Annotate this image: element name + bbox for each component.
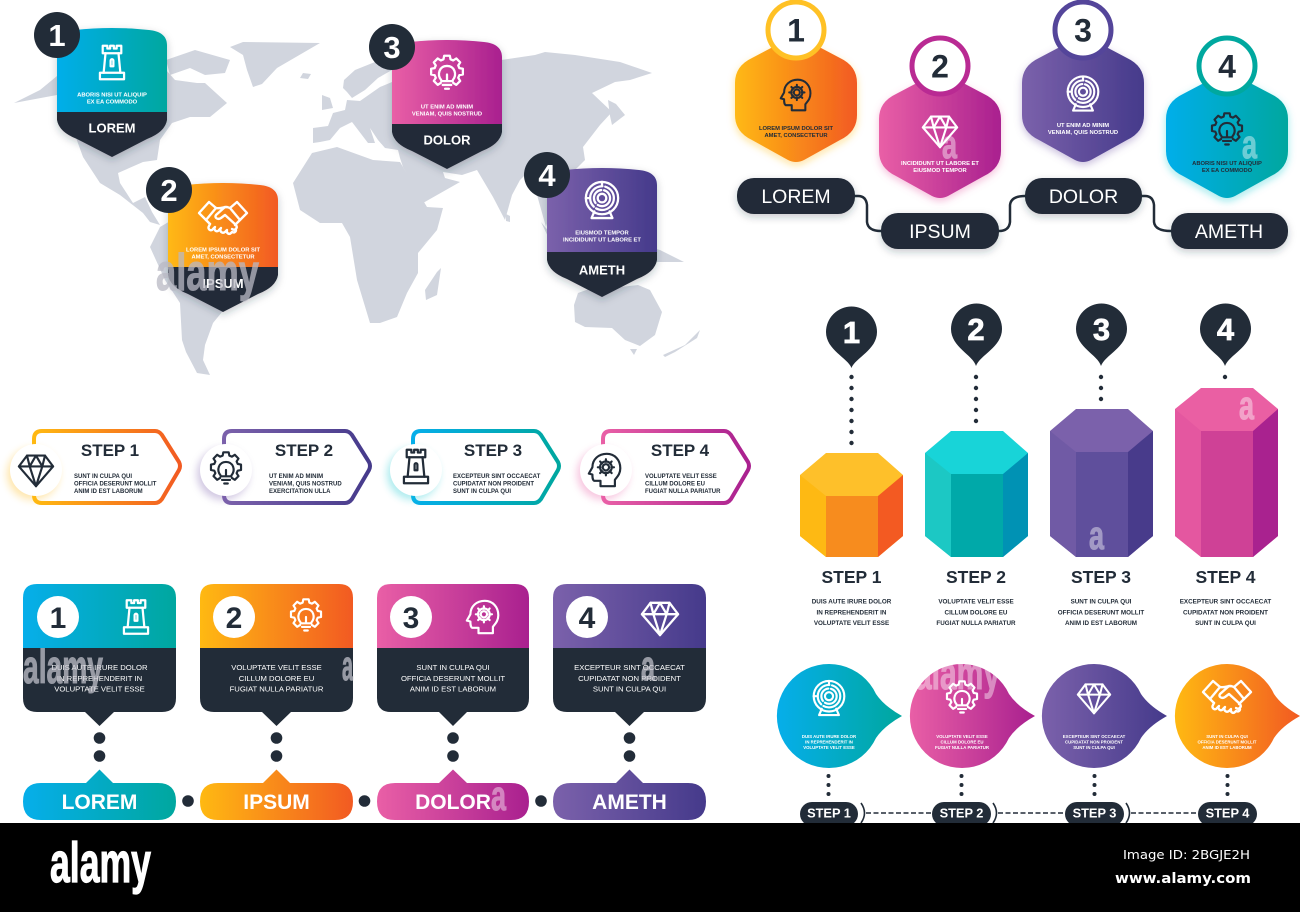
shield 1 lorem (57, 28, 167, 157)
hexagon 1 (735, 2, 857, 162)
hexagon 2 (879, 38, 1001, 198)
shield 3 dolor: VENIAM, QUIS NOSTRUD (412, 112, 482, 118)
teardrop 1: VOLUPTATE VELIT ESSE (803, 745, 855, 750)
hexagon 3: 3 (1074, 12, 1092, 48)
card 4: 4 (579, 602, 596, 635)
teardrop 3: EXCEPTEUR SINT OCCAECAT (1063, 734, 1126, 739)
pill ameth (1171, 213, 1288, 249)
panel: cards (23, 584, 706, 820)
step pill 4 (1198, 802, 1257, 826)
hexagon watermarks: a (942, 123, 958, 167)
teardrop 1: IN REPREHENDERIT IN (805, 740, 853, 744)
card watermarks: alamy (23, 640, 103, 693)
prism captions: CUPIDATAT NON PROIDENT (1183, 610, 1268, 616)
step pill 2: STEP 2 (940, 806, 983, 820)
label lorem (23, 770, 176, 820)
card 2: 2 (226, 602, 242, 635)
card watermarks: a (491, 772, 506, 819)
pin 3 (1076, 304, 1127, 366)
step pill 2 (932, 802, 991, 826)
prism captions: IN REPREHENDERIT IN (817, 610, 887, 616)
pin 3: 3 (1093, 312, 1110, 347)
step pill 3: STEP 3 (1073, 806, 1116, 820)
card 2: VOLUPTATE VELIT ESSE (231, 663, 322, 672)
prism watermarks: a (1089, 514, 1105, 558)
card 4: CUPIDATAT NON PROIDENT (578, 674, 681, 683)
prism captions: STEP 1 (822, 567, 882, 587)
teardrop 1 (777, 664, 902, 768)
hexagon watermarks (942, 123, 1258, 167)
label ameth (553, 770, 706, 820)
card 2: FUGIAT NULLA PARIATUR (230, 684, 324, 694)
teardrop watermark: alamy (915, 647, 1000, 699)
prism 2 (925, 431, 1028, 557)
teardrop connector dots (826, 774, 1230, 796)
teardrop 2: FUGIAT NULLA PARIATUR (935, 745, 990, 750)
hexagon 4: EX EA COMMODO (1202, 168, 1253, 174)
website: www.alamy.com (1115, 871, 1251, 887)
shield 2 ipsum: LOREM IPSUM DOLOR SIT (186, 248, 260, 254)
hexagon 4: 4 (1218, 48, 1236, 84)
shield 1 lorem: LOREM (89, 120, 135, 136)
hexagon 3: VENIAM, QUIS NOSTRUD (1048, 130, 1118, 136)
card 3: 3 (403, 602, 419, 635)
prism captions: OFFICIA DESERUNT MOLLIT (1058, 610, 1144, 616)
label dolor: DOLOR (415, 791, 491, 814)
hexagon 1: 1 (787, 12, 805, 48)
card watermarks (23, 640, 655, 819)
step pill 1 (800, 802, 858, 826)
panel: prisms (800, 304, 1278, 627)
step arrow 3: EXCEPTEUR SINT OCCAECAT (453, 474, 541, 480)
badge 4: 4 (538, 158, 556, 193)
card 1 (23, 584, 176, 726)
step arrow 3: CUPIDATAT NON PROIDENT (453, 482, 534, 488)
step arrow 3: SUNT IN CULPA QUI (453, 489, 511, 495)
card watermarks: a (342, 642, 353, 689)
shield 4 ameth: AMETH (579, 262, 625, 278)
label ipsum: IPSUM (243, 791, 310, 814)
card 4 (553, 584, 706, 726)
step arrow 2: EXERCITATION ULLA (269, 489, 331, 495)
step arrow 4: VOLUPTATE VELIT ESSE (645, 474, 717, 480)
watermark on map: alamy (156, 244, 259, 302)
shield 2 ipsum (168, 183, 278, 312)
step arrow 2: STEP 2 (275, 441, 333, 460)
prism captions: CILLUM DOLORE EU (945, 610, 1008, 616)
pill lorem: LOREM (761, 186, 831, 208)
pin 4 (1200, 304, 1251, 366)
step arrow 1: SUNT IN CULPA QUI (74, 474, 132, 480)
panel: map shields (34, 12, 657, 312)
shield 4 ameth (547, 168, 657, 297)
hexagon 3 (1022, 2, 1144, 162)
panel: teardrops (777, 647, 1300, 826)
badge 1 (34, 12, 80, 58)
pill dolor: DOLOR (1049, 186, 1118, 208)
badge 2: 2 (160, 173, 178, 208)
pin 1 (826, 307, 877, 368)
panel: hexagons (735, 2, 1288, 249)
prism captions: STEP 3 (1071, 567, 1131, 587)
badge 3 (369, 24, 415, 70)
prism captions: ANIM ID EST LABORUM (1065, 620, 1137, 627)
prism captions: STEP 4 (1196, 567, 1256, 587)
hexagon 2: 2 (931, 48, 949, 84)
step arrow 4: FUGIAT NULLA PARIATUR (645, 489, 721, 495)
prism 4 (1175, 388, 1278, 557)
hexagon watermarks: a (1242, 123, 1258, 167)
hexagon 1: AMET, CONSECTETUR (764, 133, 828, 139)
step pill 4: STEP 4 (1206, 806, 1250, 820)
teardrop 4 (1175, 664, 1300, 768)
step pill 1: STEP 1 (807, 806, 851, 820)
prism captions: FUGIAT NULLA PARIATUR (936, 620, 1016, 627)
prism captions (812, 567, 1271, 627)
pin 1: 1 (843, 315, 860, 350)
pill lorem (737, 178, 855, 214)
teardrop 4: OFFICIA DESERUNT MOLLIT (1197, 740, 1257, 744)
hexagon 1: LOREM IPSUM DOLOR SIT (759, 126, 833, 132)
shield 4 ameth: EIUSMOD TEMPOR (575, 230, 630, 236)
teardrop 2: CILLUM DOLORE EU (941, 740, 983, 744)
label lorem: LOREM (62, 791, 137, 814)
card 3: ANIM ID EST LABORUM (410, 684, 496, 694)
prism watermarks (1089, 384, 1255, 558)
hexagon 2: EIUSMOD TEMPOR (913, 168, 968, 174)
prism 1 (800, 453, 903, 557)
teardrop 1: DUIS AUTE IRURE DOLOR (802, 734, 857, 739)
teardrop 2: VOLUPTATE VELIT ESSE (936, 734, 988, 739)
card 4: EXCEPTEUR SINT OCCAECAT (574, 663, 685, 672)
shield 3 dolor: UT ENIM AD MINIM (421, 104, 473, 110)
step arrow 2: VENIAM, QUIS NOSTRUD (269, 482, 342, 488)
pin 2: 2 (967, 312, 985, 347)
card 1: DUIS AUTE IRURE DOLOR (51, 663, 148, 672)
prism captions: DUIS AUTE IRURE DOLOR (812, 598, 892, 606)
step arrow 4 (577, 431, 749, 503)
step arrow 1: ANIM ID EST LABORUM (74, 489, 143, 495)
card watermarks: a (641, 642, 655, 689)
shield 3 dolor: DOLOR (424, 132, 471, 148)
hexagon 3: UT ENIM AD MINIM (1057, 123, 1109, 129)
badge 4 (524, 152, 570, 198)
teardrop 4: SUNT IN CULPA QUI (1206, 734, 1248, 739)
teardrop 3: CUPIDATAT NON PROIDENT (1065, 740, 1123, 744)
prism captions: SUNT IN CULPA QUI (1071, 598, 1132, 606)
prism watermarks: a (1239, 384, 1255, 428)
pill ipsum (881, 213, 999, 249)
prism captions: SUNT IN CULPA QUI (1195, 620, 1256, 627)
panel: step arrows row (7, 431, 749, 503)
dotted connectors (849, 375, 1227, 445)
label dolor (377, 770, 529, 820)
prism captions: VOLUPTATE VELIT ESSE (814, 620, 889, 627)
teardrop 4: ANIM ID EST LABORUM (1202, 745, 1252, 750)
pin 4: 4 (1217, 312, 1235, 347)
badge 2 (146, 167, 192, 213)
card 2: CILLUM DOLORE EU (239, 674, 314, 683)
shield 2 ipsum: AMET, CONSECTETUR (191, 254, 255, 260)
card 4: SUNT IN CULPA QUI (593, 684, 666, 694)
card 2 (200, 584, 353, 726)
step arrow 4: STEP 4 (651, 441, 710, 460)
label ameth: AMETH (592, 791, 667, 814)
world map (14, 42, 700, 375)
step arrow 4: CILLUM DOLORE EU (645, 482, 705, 488)
prism captions: VOLUPTATE VELIT ESSE (938, 598, 1014, 606)
prism 3 (1050, 409, 1153, 557)
image id: Image ID: 2BGJE2H (1123, 847, 1250, 862)
step pill 3 (1065, 802, 1124, 826)
step arrow 2: UT ENIM AD MINIM (269, 474, 323, 480)
pill ameth: AMETH (1195, 221, 1263, 243)
pill dolor (1025, 178, 1142, 214)
step arrow 3 (387, 431, 559, 503)
card connector dots (94, 732, 635, 807)
step arrow 1: OFFICIA DESERUNT MOLLIT (74, 482, 157, 488)
card 3: SUNT IN CULPA QUI (416, 663, 490, 672)
teardrop 2 (910, 664, 1035, 768)
shield 3 dolor (392, 40, 502, 169)
hexagon 2: INCIDIDUNT UT LABORE ET (901, 161, 979, 167)
hexagon 4: ABORIS NISI UT ALIQUIP (1192, 161, 1262, 167)
badge 1: 1 (48, 18, 66, 53)
shield 2 ipsum: IPSUM (202, 276, 244, 291)
step arrow 3: STEP 3 (464, 441, 522, 460)
shield 4 ameth: INCIDIDUNT UT LABORE ET (563, 238, 641, 244)
timeline dashes (861, 803, 1198, 823)
pill ipsum: IPSUM (909, 221, 971, 243)
step arrow 1 (7, 431, 180, 503)
prism captions: STEP 2 (946, 567, 1006, 587)
teardrop 3 (1042, 664, 1167, 768)
pin 2 (951, 304, 1002, 366)
shield 1 lorem: ABORIS NISI UT ALIQUIP (77, 92, 147, 98)
footer bar (0, 823, 1300, 912)
shield 1 lorem: EX EA COMMODO (87, 100, 138, 106)
card 1: IN REPREHENDERIT IN (57, 674, 142, 683)
card 3: OFFICIA DESERUNT MOLLIT (401, 674, 505, 683)
step arrow 1: STEP 1 (81, 441, 139, 460)
teardrop 3: SUNT IN CULPA QUI (1073, 745, 1115, 750)
card 1: VOLUPTATE VELIT ESSE (54, 684, 145, 694)
connectors between labels (855, 196, 1171, 231)
prism captions: EXCEPTEUR SINT OCCAECAT (1180, 598, 1271, 606)
badge 3: 3 (383, 30, 401, 65)
alamy logo: alamy (50, 831, 151, 895)
step arrow 2 (197, 431, 370, 503)
card 1: 1 (50, 602, 66, 635)
card 3 (377, 584, 529, 726)
label ipsum (200, 770, 353, 820)
hexagon 4 (1166, 38, 1288, 198)
